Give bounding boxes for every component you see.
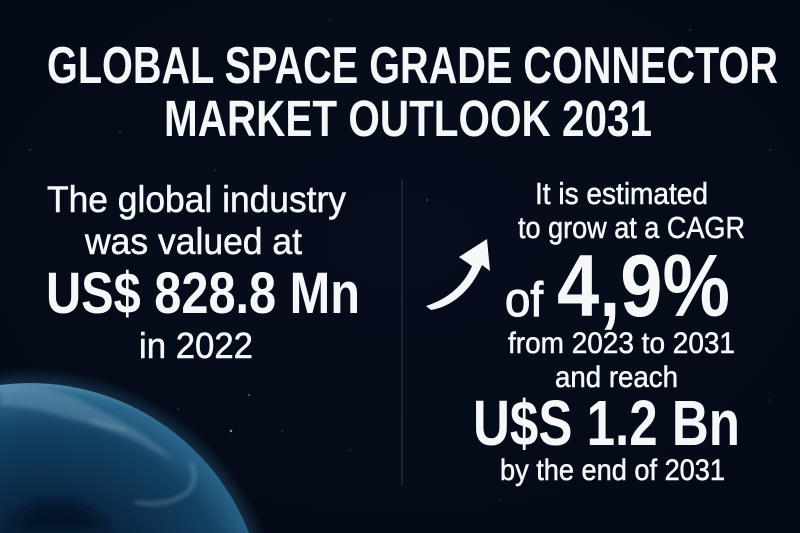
right panel: growth forecast: to grow at a CAGR <box>518 210 745 245</box>
right panel: growth forecast: U$S 1.2 Bn <box>473 387 740 459</box>
left panel: current market value: The global industry <box>47 179 346 220</box>
left panel: current market value: in 2022 <box>139 325 253 366</box>
right panel: growth forecast: of <box>505 274 544 327</box>
title: MARKET OUTLOOK 2031 <box>164 90 652 147</box>
right panel: growth forecast: 4,9% <box>557 236 730 335</box>
right panel: growth forecast: It is estimated <box>535 176 708 211</box>
right panel: growth forecast: by the end of 2031 <box>500 454 725 487</box>
right panel: growth forecast: and reach <box>555 361 678 394</box>
divider <box>402 180 403 485</box>
right panel: growth forecast <box>473 176 745 487</box>
right panel: growth forecast: from 2023 to 2031 <box>508 327 735 360</box>
planet earth <box>0 366 265 533</box>
left panel: current market value: was valued at <box>84 221 303 262</box>
title <box>47 37 778 147</box>
left panel: current market value: US$ 828.8 Mn <box>46 261 360 326</box>
left panel: current market value <box>46 179 360 366</box>
icon: growth arrow <box>426 239 490 310</box>
